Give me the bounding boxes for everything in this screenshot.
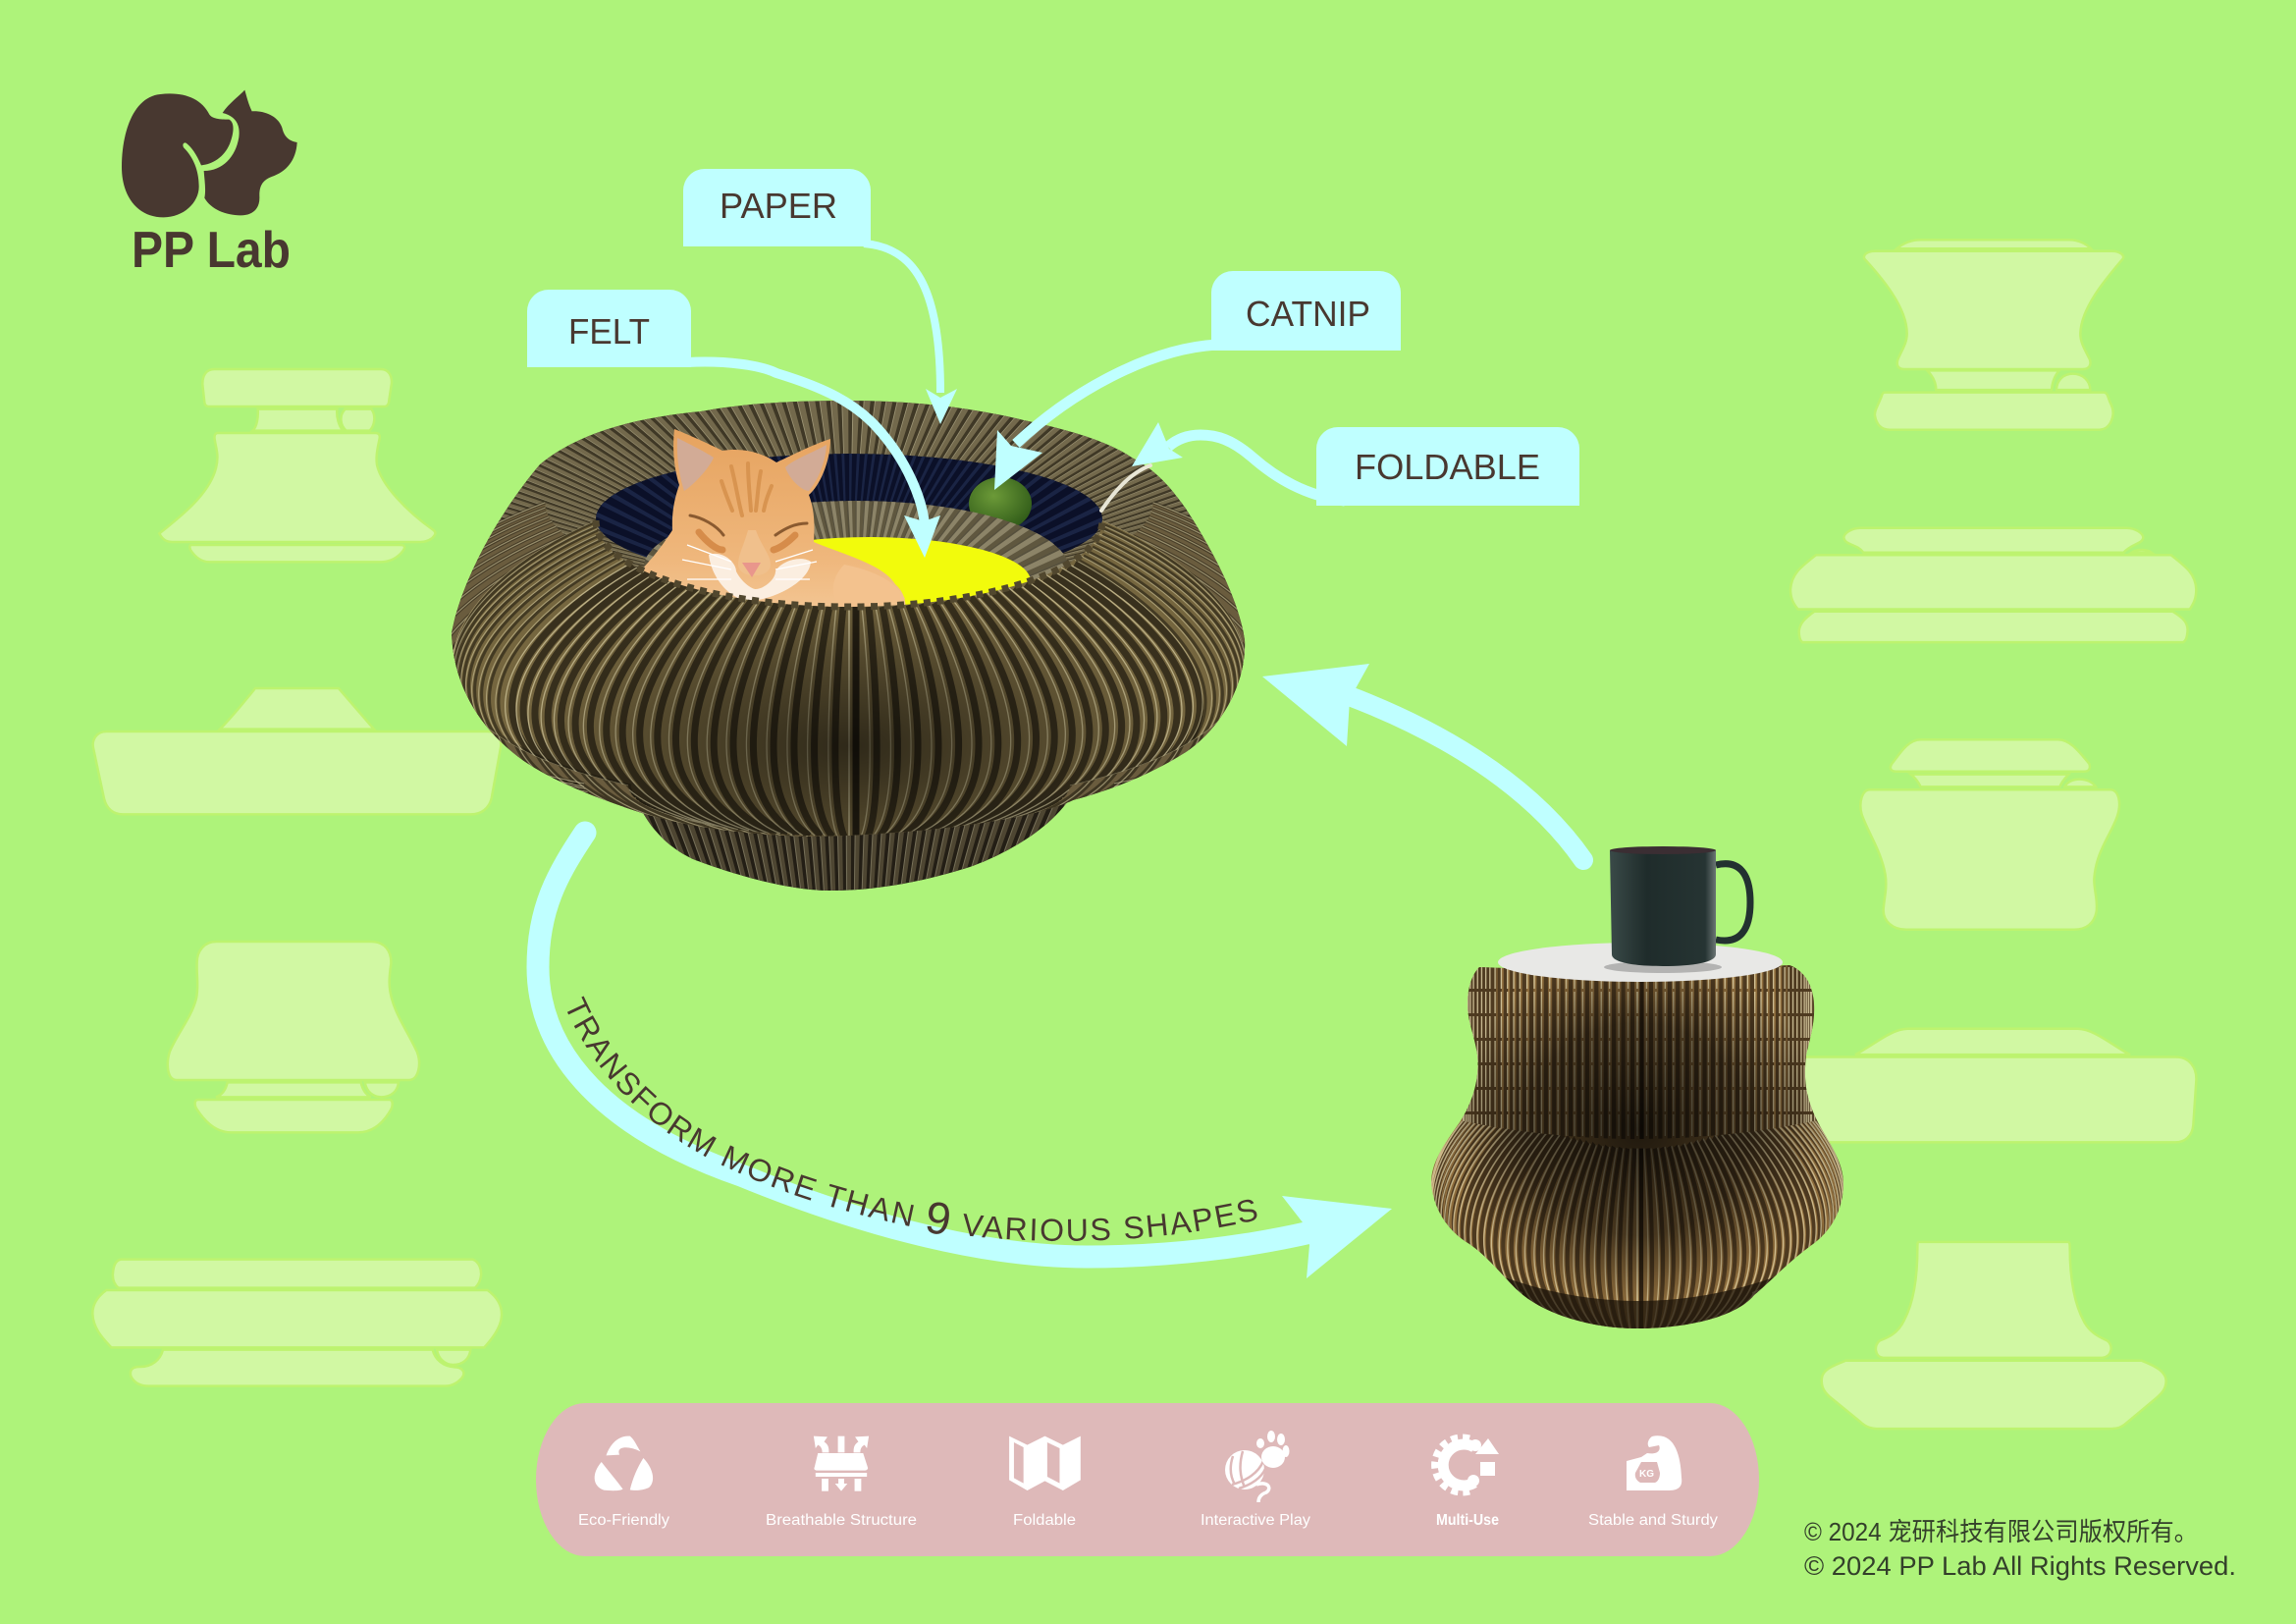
copyright text [1804, 1517, 2236, 1581]
callout: FOLDABLE: FOLDABLE [1355, 447, 1540, 487]
callout arrow: catnip [994, 345, 1217, 490]
lower base of bed [644, 803, 1067, 891]
background silhouette: shape 9 right [1822, 1242, 2166, 1429]
back rim of bed [442, 393, 1256, 844]
background silhouette: shape 5 right [1864, 240, 2123, 430]
callout arrow: foldable [1132, 422, 1345, 501]
callout: FELT [527, 290, 691, 367]
curved caption [567, 996, 1256, 1241]
pleat teeth along front rim [596, 520, 1102, 607]
callout: PAPER [683, 169, 871, 246]
cat [639, 429, 906, 614]
arrow: return from stool to bed [1262, 664, 1583, 860]
background silhouette: shape 6 right [1790, 528, 2196, 642]
icon: yarn ball and paw [1225, 1431, 1290, 1502]
callout: CATNIP [1211, 271, 1401, 351]
icon: multi-use gear [1435, 1437, 1499, 1492]
background silhouette: shape 2 left [93, 688, 501, 814]
logo: PP Lab: PP Lab [132, 222, 291, 279]
catnip ball [969, 477, 1032, 530]
background silhouette: shape 8 right [1735, 1029, 2196, 1142]
stool product with mug [1423, 846, 1855, 1335]
label: Multi-Use: Multi-Use [1436, 1512, 1499, 1529]
callout: FELT: FELT [568, 311, 650, 352]
arrow: transform curve from bed to stool [538, 833, 1392, 1278]
callout arrow: paper [864, 244, 957, 424]
background silhouette: shape 7 right [1860, 739, 2119, 930]
front of bed, pleated [454, 520, 1245, 837]
curved caption: 9 [927, 1202, 949, 1234]
mug [1604, 846, 1750, 973]
pleated stool body [1431, 965, 1843, 1328]
white highlight on folded rim [1101, 465, 1150, 511]
icon: breathable structure [814, 1436, 869, 1491]
background silhouette: shape 1 left [159, 369, 435, 562]
curved caption: TRANSFORM MORE THAN [567, 996, 914, 1226]
icon: stable and sturdy arm: KG [1639, 1469, 1654, 1480]
curved caption: VARIOUS SHAPES [964, 1200, 1256, 1241]
label: Breathable Structure: Breathable Structure [766, 1512, 917, 1529]
label: Stable and Sturdy: Stable and Sturdy [1588, 1512, 1718, 1529]
copyright text: © 2024 宠研科技有限公司版权所有。 [1804, 1517, 2198, 1546]
dark interior [596, 454, 1102, 558]
icon: eco-friendly leaves [595, 1436, 653, 1490]
feature panel [536, 1403, 1759, 1556]
inner ring of bed [643, 501, 1067, 579]
icon: stable and sturdy arm [1627, 1435, 1682, 1490]
copyright text: © 2024 PP Lab All Rights Reserved. [1804, 1551, 2236, 1581]
white plate [1498, 943, 1783, 982]
logo: PP Lab [122, 90, 297, 279]
callout arrow: felt [687, 362, 940, 558]
callout: CATNIP: CATNIP [1246, 294, 1370, 334]
callout: PAPER: PAPER [720, 186, 837, 226]
yellow felt pad [707, 537, 1031, 625]
callout: FOLDABLE [1316, 427, 1579, 506]
label: Interactive Play: Interactive Play [1201, 1512, 1310, 1529]
background silhouette: shape 4 left [92, 1260, 502, 1386]
label: Foldable: Foldable [1013, 1512, 1076, 1529]
icon: folding map [1009, 1436, 1081, 1490]
cat bed product: bowl form [452, 401, 1245, 891]
background silhouette: shape 3 left [168, 942, 419, 1132]
shoulder pleats of bed, flaring to the silhouette [452, 501, 1245, 837]
label: Eco-Friendly: Eco-Friendly [578, 1512, 669, 1529]
